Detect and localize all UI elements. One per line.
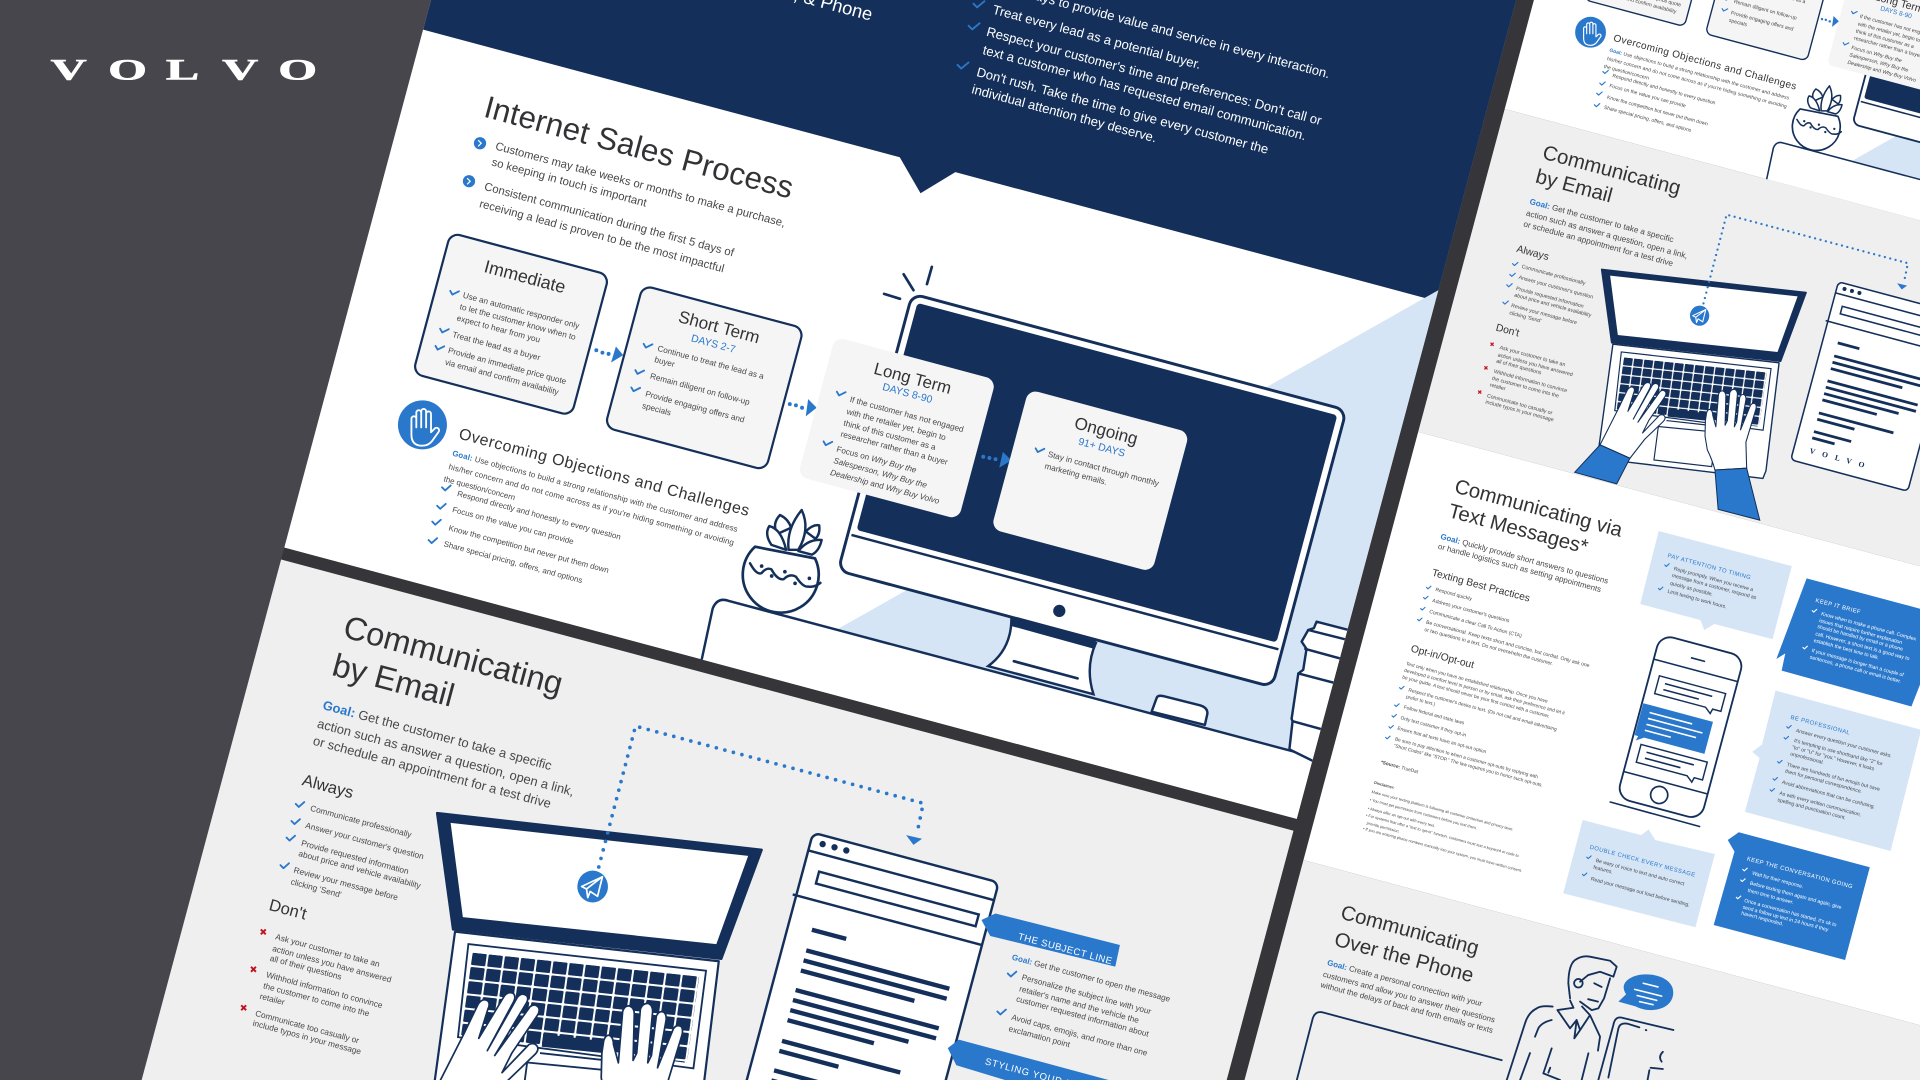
navy banner checklist — [936, 0, 1332, 157]
opt-in text block: *Source: TrueDat — [1380, 760, 1419, 776]
card: Short Term (small): specials — [1728, 18, 1748, 28]
disclaimer: Disclaimer: — [1374, 780, 1395, 790]
disclaimer: • If you are entering phone numbers manually into your system, you must have written consent. — [1363, 826, 1523, 873]
navy banner checklist: Respect your customer's time and preferences: Don't call or — [985, 24, 1324, 128]
list: Don't: retailer — [259, 991, 286, 1007]
objections text block (small): Respond directly and honestly to every question — [1612, 73, 1716, 106]
navy banner checklist: text a customer who has requested email communication. — [981, 42, 1308, 143]
card: Long Term — [798, 337, 996, 519]
card: Long Term: think of this customer as a — [843, 419, 937, 452]
callout: Double Check Every Message — [1563, 820, 1715, 927]
list: Don't (small) — [1478, 323, 1573, 423]
disclaimer: • You must get permission from customers before you text them. — [1369, 797, 1478, 830]
illustration: desk outline — [1294, 1012, 1502, 1080]
list: Don't (small): retailer — [1489, 382, 1506, 392]
panel: right page sheet — [1095, 0, 1920, 1080]
card: Short Term: specials — [641, 401, 672, 418]
objections text block (small): Know the competition but never put them down — [1606, 95, 1709, 128]
list: Don't (small): Ask your customer to take an — [1499, 345, 1566, 368]
opt-in text block: Ensure that all texts have an opt-out option — [1397, 726, 1487, 755]
intro bullets: Customers may take weeks or months to make a purchase, — [494, 141, 786, 230]
disclaimer — [1363, 780, 1523, 873]
list: Don't (small): include typos in your message — [1485, 399, 1554, 423]
intro bullets: so keeping in touch is important — [490, 157, 649, 210]
goal paragraph: or handle logistics such as setting appointments — [1437, 542, 1602, 594]
objections text block (small): Goal: Use objections to build a strong relationship with the customer and address — [1609, 48, 1790, 102]
list: Always (small) — [1503, 244, 1594, 326]
objections text block: Know the competition but never put them down — [448, 523, 610, 575]
callout: The Subject Line — [981, 913, 1172, 1058]
heading: Internet Sales Process: Internet Sales Process — [481, 89, 797, 205]
objections text block (small): the question/concern — [1603, 64, 1650, 82]
heading: Overcoming Objections: Overcoming Objections and Challenges — [457, 426, 751, 520]
objections text block: Focus on the value you can provide — [451, 505, 575, 546]
card: Short Term: buyer — [654, 355, 676, 369]
callout: Be Professional: As with every written communication, — [1779, 791, 1862, 818]
opt-in text block: "Short Codes" like "STOP." The law requires you to honor such opt-outs. — [1393, 743, 1543, 789]
objections text block: his/her concern and do not come across as if you're hiding something or avoiding — [448, 462, 735, 547]
callout: Double Check Every Message: Be wary of voice to text and auto correct — [1595, 858, 1685, 888]
callout: Keep It Brief: Know when to make a phone call. Complex — [1820, 611, 1917, 643]
callout: Keep the Conversation Going: Before texting them again and again, give — [1749, 881, 1842, 911]
heading: Overcoming Objections (small): Overcoming Objections and Challenges — [1612, 33, 1798, 93]
goal paragraph: customers and allow you to answer their questions — [1322, 970, 1496, 1024]
list: Always — [280, 770, 425, 902]
list: Always: Answer your customer's question — [304, 820, 425, 861]
heading: Opt-in/Opt-out: Opt-in/Opt-out — [1409, 644, 1475, 671]
list: Always: clicking 'Send' — [290, 876, 343, 900]
card: Short Term: Remain diligent on follow-up — [649, 372, 751, 407]
list: Texting best practices: Communicate a clear Call To Action (CTA) — [1428, 609, 1523, 640]
card: Long Term: DAYS 8-90 — [881, 382, 934, 406]
heading: Communicating by Email: by Email — [329, 647, 458, 714]
goal paragraph: Goal: Create a personal connection with your — [1326, 958, 1484, 1008]
opt-in text block: Respect the customer's desire to text. (Do not call and email advertising — [1408, 687, 1558, 733]
callout: Be Professional: them for personal correspondence. — [1784, 769, 1863, 795]
illustration: support agent with speech bubble — [1507, 956, 1617, 1080]
list: Always (small): Always — [1515, 244, 1550, 263]
list: Don't — [241, 895, 393, 1056]
objections text block: the question/concern — [443, 474, 516, 502]
goal paragraph (small): Goal: Get the customer to take a specific — [1529, 197, 1675, 244]
objections text block: Share special pricing, offers, and options — [443, 539, 583, 585]
opt-in text block: Follow federal and state laws — [1403, 705, 1465, 727]
list: Texting best practices: or two questions in a text. Do not overwhelm the customer. — [1424, 627, 1554, 667]
list: Don't (small): all of their questions — [1495, 359, 1542, 376]
navy banner checklist: Don't rush. Take the time to give every customer the — [975, 64, 1270, 157]
callout: Keep the Conversation Going: KEEP THE CONVERSATION GOING — [1746, 856, 1853, 890]
list: Always: Review your message before — [293, 865, 400, 902]
opt-in text block: Text only when you have an established relationship. Once you have — [1405, 661, 1549, 705]
disclaimer: • Always offer an opt-out with every text. — [1367, 806, 1436, 828]
callout: Double Check Every Message: Read your message out loud before sending. — [1590, 876, 1690, 909]
list: Always (small): Review your message before — [1510, 303, 1578, 326]
goal paragraph: action such as answer a question, open a link, — [316, 716, 576, 799]
card: Ongoing: marketing emails. — [1044, 462, 1108, 487]
panel: left page sheet — [59, 0, 1539, 1080]
callout: Pay Attention to Timing: quickly as possible. — [1669, 581, 1714, 598]
illustration: desk, monitor, plant, arrows, hand icon — [398, 267, 1469, 857]
objections text block — [429, 449, 739, 585]
opt-in text block: Be sure to pay attention to when a customer opt-outs by replying with — [1394, 736, 1539, 780]
card: Immediate: Treat the lead as a buyer — [451, 330, 542, 362]
heading: Communicating Over the Phone: Communicating — [1338, 901, 1481, 960]
panel: Internet Sales Process section — [398, 0, 1469, 857]
opt-in text block — [1380, 661, 1566, 789]
heading: Communicating Over the Phone: Over the Phone — [1332, 928, 1476, 987]
objections text block (small) — [1594, 48, 1790, 134]
heading: Communicating by Email (small): by Email — [1533, 165, 1615, 207]
callout: Pay Attention to Timing: Limit texting to work hours. — [1667, 589, 1727, 610]
panel: right page, email section copy — [1478, 141, 1920, 520]
card: Long Term (small): Dealership and Why Buy Volvo — [1847, 60, 1917, 84]
list: Don't: Don't — [267, 895, 309, 924]
list: Always (small): Answer your customer's question — [1518, 275, 1594, 301]
callout: The Subject Line: retailer's name and the vehicle the — [1018, 984, 1140, 1025]
list: Texting best practices: Address your customer's questions — [1432, 598, 1510, 624]
card: Short Term: Continue to treat the lead as a — [657, 344, 765, 381]
list: Always (small): clicking 'Send' — [1509, 310, 1542, 325]
list: Texting best practices — [1418, 586, 1590, 669]
card: Short Term — [605, 285, 804, 470]
objections text block: Respond directly and honestly to every question — [456, 489, 622, 542]
list: Don't: the customer to come into the — [262, 980, 371, 1019]
callout: Keep It Brief: sentences, a phone call or email is better. — [1809, 655, 1902, 685]
list: Don't: action unless you have answered — [271, 943, 393, 985]
list: Don't: all of their questions — [269, 953, 343, 982]
callout: Be Professional: BE PROFESSIONAL — [1790, 715, 1851, 737]
heading: Communicating Over the Phone — [1332, 901, 1481, 987]
icon: speech bubble — [1618, 974, 1673, 1010]
callout: Keep It Brief: call. However, a short text is a good way to — [1815, 631, 1910, 662]
goal paragraph: without the delays of back and forth emails or texts — [1319, 980, 1494, 1035]
card: Immediate: to let the customer know when to — [459, 302, 577, 342]
card: Long Term (small): Salesperson, Why Buy the — [1849, 52, 1909, 74]
list: Don't (small): action unless you have answered — [1497, 352, 1573, 378]
opt-in text block: be your guide. A text should never be your first contact with a customer. — [1402, 675, 1550, 720]
card: Immediate (small) — [1587, 0, 1692, 26]
card: Immediate: Provide an immediate price quote — [447, 346, 568, 386]
callout: Keep It Brief: should be handled by email or a phone — [1817, 624, 1904, 653]
card: Immediate — [413, 233, 609, 416]
list: Texting best practices: Be conversational. Keep texts short and concise, but cordial. Only ask one — [1425, 620, 1590, 669]
card: Short Term: Provide engaging offers and — [644, 389, 746, 425]
card: Long Term (small): DAYS 8-90 — [1879, 5, 1913, 20]
callout: The Subject Line: Personalize the subject line with your — [1021, 973, 1152, 1016]
opt-in text block: developed a comfort level in person or by email, ask their preference and let it — [1403, 668, 1566, 717]
card: Long Term: Long Term — [872, 359, 953, 398]
card: Immediate: Immediate — [482, 256, 568, 297]
card: Ongoing: 91+ DAYS — [1077, 437, 1126, 460]
card: Short Term: DAYS 2-7 — [690, 333, 737, 356]
navy banner checklist: Treat every lead as a potential buyer. — [991, 2, 1203, 72]
callout: The Subject Line: Goal: Get the customer to open the message — [1011, 953, 1172, 1004]
callout: The Subject Line: THE SUBJECT LINE — [1017, 931, 1113, 967]
card: Long Term: Salesperson, Why Buy the — [832, 456, 928, 490]
callout: Be Professional: "to" or "U" for "you." However, it looks — [1791, 745, 1875, 773]
callout: Styling Your Message — [948, 1040, 1108, 1080]
callout: Be Professional: spelling and punctuation count. — [1777, 797, 1846, 821]
intro bullets — [463, 137, 786, 275]
card: Long Term: researcher rather than a buyer — [840, 430, 949, 467]
callout: Keep It Brief: establish the best time to talk. — [1813, 638, 1880, 661]
objections text block (small): Focus on the value you can provide — [1609, 83, 1687, 109]
list: Texting best practices: Respond quickly — [1435, 587, 1473, 603]
heading: Communicating via Text Messages: Communicating via — [1452, 476, 1625, 542]
intro bullets: receiving a lead is proven to be the most impactful — [478, 198, 725, 275]
callout: Pay Attention to Timing — [1640, 531, 1792, 639]
callout: The Subject Line: exclamation point — [1008, 1024, 1072, 1050]
goal paragraph: Goal: Quickly provide short answers to questions — [1439, 532, 1609, 586]
heading: Texting Best Practices: Texting Best Practices — [1431, 568, 1531, 605]
brand mark on email window (small): VOLVO — [1809, 446, 1873, 471]
callout: Keep It Brief: issues that require further explanation — [1818, 618, 1903, 646]
opt-in text block: prefer to text.) — [1405, 694, 1436, 708]
list: Don't: Ask your customer to take an — [274, 931, 381, 969]
disclaimer: Make sure your texting platform is following all customer protection and privacy laws: — [1371, 789, 1514, 832]
objections text block (small): his/her concern and do not come across as if you're hiding something or avoiding — [1606, 56, 1788, 110]
panel: Communicating via Text Messages — [1363, 476, 1920, 960]
scaled email content — [1478, 141, 1920, 520]
goal paragraph (small): or schedule an appointment for a test drive — [1522, 219, 1675, 268]
card: Short Term (small) — [1705, 0, 1831, 61]
illustration: laptop and email window (small) — [1575, 215, 1920, 520]
callout: Pay Attention to Timing: message from a customer, respond as — [1671, 573, 1757, 601]
objections text block (small): Share special pricing, offers, and options — [1603, 105, 1692, 134]
list: Don't: Communicate too casually or — [254, 1008, 361, 1045]
card: Long Term (small): researcher rather than a buyer — [1853, 36, 1920, 59]
callout: Be Professional: It's tempting to use shorthand like "2" for — [1793, 738, 1883, 768]
callout: Be Professional: unprofessional. — [1789, 751, 1825, 766]
opt-in text block: Only text customer if they opt-in — [1400, 715, 1467, 739]
heading: Communicating by Email (small): Communicating — [1540, 141, 1683, 200]
card: Ongoing: Ongoing — [1072, 413, 1140, 449]
list: Don't (small): Communicate too casually or — [1486, 393, 1553, 417]
list: Always: about price and vehicle availability — [298, 848, 423, 891]
illustration: monitor outline — [1598, 1017, 1673, 1080]
card: Short Term: Short Term — [676, 306, 762, 347]
list: Always (small): about price and vehicle availability — [1513, 293, 1592, 319]
panel: Communicating by Email section — [241, 609, 1172, 1080]
callout: Keep the Conversation Going: haven't responded. — [1740, 911, 1784, 928]
disclaimer: • For systems that offer a "text to opt-in" function, customers must text a keyword or code to — [1366, 812, 1520, 858]
illustration: desk, plant and hand icon — [1575, 16, 1920, 220]
callout: Be Professional: Answer every question your customer asks. — [1795, 728, 1892, 759]
list: Don't (small): the customer to come into the — [1491, 376, 1560, 400]
card: Immediate: Use an automatic responder only — [462, 291, 581, 331]
callout: Keep the Conversation Going: them time to answer. — [1747, 888, 1794, 906]
card: Short Term (small): Provide engaging offers and — [1730, 10, 1794, 33]
callout: Keep It Brief: KEEP IT BRIEF — [1815, 598, 1861, 616]
card: Long Term: Focus on Why Buy the — [836, 445, 918, 475]
list: Always: Provide requested information — [300, 838, 410, 876]
callout: Keep the Conversation Going: send a follow up text in 24 hours if they — [1742, 905, 1829, 933]
list: Always: Always — [300, 770, 356, 802]
list: Don't (small): Withhold information to convince — [1493, 369, 1568, 394]
disclaimer: provide permission. — [1366, 820, 1400, 834]
list: Always (small): Communicate professionally — [1521, 264, 1586, 287]
list: Don't: include typos in your message — [252, 1018, 363, 1056]
card: Ongoing: Stay in contact through monthly — [1047, 450, 1161, 488]
list: Don't (small): Don't — [1494, 323, 1521, 339]
list: Always (small): Provide requested information — [1515, 286, 1584, 310]
callout: Be Professional — [1745, 691, 1920, 851]
callout: The Subject Line: Avoid caps, emojis, and more than one — [1011, 1013, 1149, 1058]
callout: Pay Attention to Timing: Reply promptly. When you receive a — [1673, 566, 1754, 593]
list: Always: Communicate professionally — [309, 803, 414, 840]
heading: Communicating by Email: Communicating — [340, 609, 567, 702]
card: Long Term (small): think of this customer as a — [1855, 29, 1915, 50]
goal paragraph (small): action such as answer a question, open a link, — [1525, 209, 1689, 261]
callout: Keep It Brief — [1776, 578, 1920, 707]
card: Long Term: If the customer has not engaged — [849, 395, 965, 434]
scaled process content — [1575, 0, 1920, 220]
callout: Keep the Conversation Going: Once a conversation has started, it's ok to — [1744, 898, 1837, 928]
callout: Be Professional: Avoid abbreviations that can be confusing. — [1781, 780, 1876, 810]
card: Immediate: expect to hear from you — [456, 314, 542, 345]
panel: right page, process section copy — [1575, 0, 1920, 220]
card: Long Term: Dealership and Why Buy Volvo — [829, 468, 941, 506]
callout: Pay Attention to Timing: PAY ATTENTION TO TIMING — [1667, 553, 1752, 581]
navy banner checklist: individual attention they deserve. — [970, 81, 1158, 145]
brand logo: Volvo wordmark: VOLVO — [51, 53, 317, 86]
goal paragraph: Goal: Get the customer to take a specific — [321, 697, 554, 773]
illustration: laptop and email window — [394, 726, 999, 1080]
objections text block: Goal: Use objections to build a strong relationship with the customer and address — [451, 449, 739, 534]
panel: Communicating Over the Phone — [1294, 901, 1673, 1080]
callout: Be Professional: There are hundreds of fun emojis but save — [1786, 762, 1881, 793]
illustration: phone with chat bubbles — [1610, 634, 1744, 827]
callout: Double Check Every Message: features. — [1593, 865, 1613, 876]
card: Long Term (small): with the retailer yet, begin to — [1857, 21, 1920, 44]
goal paragraph: or schedule an appointment for a test drive — [311, 733, 553, 811]
card: Immediate: via email and confirm availability — [444, 358, 561, 397]
callout: Keep It Brief: If your message is longer than a couple of — [1811, 648, 1905, 679]
callout: Double Check Every Message: DOUBLE CHECK EVERY MESSAGE — [1589, 845, 1696, 879]
list: Don't: Withhold information to convince — [265, 969, 384, 1010]
callout: Keep the Conversation Going — [1714, 832, 1870, 960]
card: Ongoing — [991, 389, 1189, 572]
intro bullets: Consistent communication during the first 5 days of — [483, 181, 736, 260]
card: Long Term: with the retailer yet, begin to — [845, 407, 947, 442]
callout: Keep the Conversation Going: Wait for their response. — [1751, 871, 1804, 890]
heading: Communicating via Text Messages: Text Messages* — [1446, 500, 1590, 559]
card: Long Term (small): Focus on Why Buy the — [1851, 45, 1902, 64]
callout: The Subject Line: customer requested information about — [1015, 995, 1150, 1039]
card: Long Term (small) — [1827, 0, 1920, 92]
